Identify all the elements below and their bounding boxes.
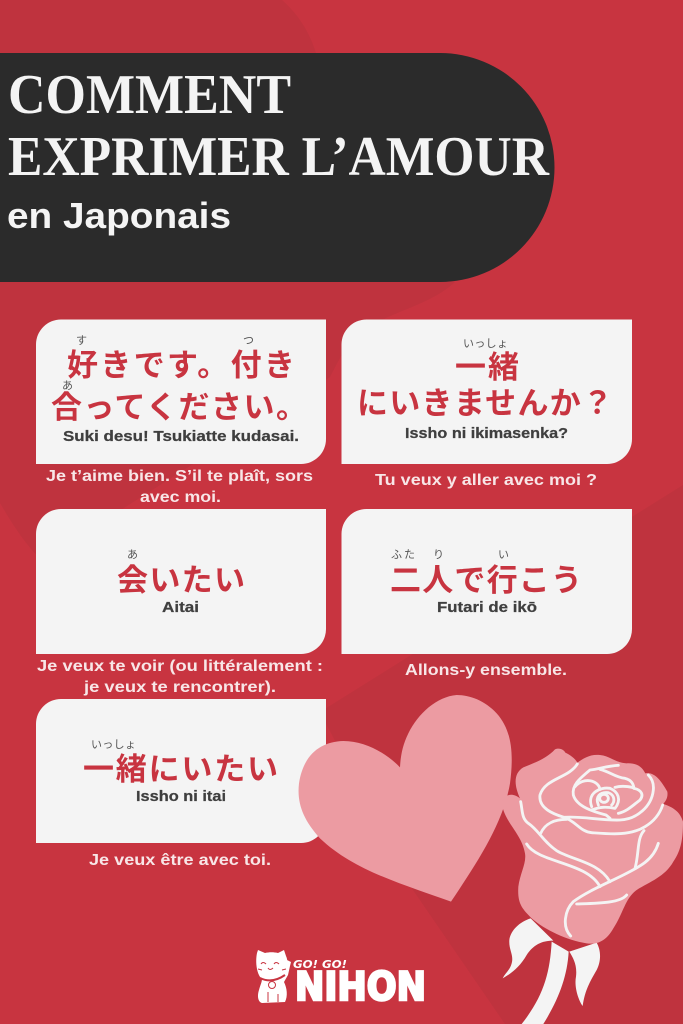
romaji: Suki desu! Tsukiatte kudasai. — [63, 428, 299, 445]
background dark heart, lower right — [320, 485, 683, 1024]
japanese phrase: 好きです。付き — [67, 348, 295, 383]
caption 3: Je veux te voir (ou littéralement : — [37, 658, 323, 675]
caption 1: Je t’aime bien. S’il te plaît, sors — [46, 468, 313, 485]
caption 5: Je veux être avec toi. — [89, 852, 271, 869]
japanese phrase: 一緒 — [455, 350, 519, 385]
card 5 — [36, 699, 326, 843]
japanese phrase: 一緒にいたい — [83, 752, 278, 787]
romaji: Futari de ikō — [437, 599, 537, 616]
furigana: あ — [127, 548, 138, 561]
japanese phrase — [51, 348, 307, 425]
card 3 — [36, 509, 326, 654]
title line 1: COMMENT — [8, 64, 291, 126]
furigana: いっしょ — [91, 738, 136, 751]
rose petal lines — [521, 764, 663, 936]
furigana — [391, 548, 509, 561]
romaji: Aitai — [162, 599, 199, 616]
caption 1 — [46, 468, 313, 506]
japanese phrase: 二人で行こう — [390, 563, 582, 598]
background dark heart, upper left — [0, 0, 455, 560]
header banner — [0, 53, 554, 282]
japanese phrase — [357, 350, 613, 421]
icon: rose — [502, 749, 683, 1024]
furigana: ふた — [391, 548, 415, 561]
subtitle: en Japonais — [7, 195, 231, 236]
icon: lucky cat — [256, 950, 291, 1003]
caption 2: Tu veux y aller avec moi ? — [375, 472, 597, 489]
furigana: り — [433, 548, 444, 561]
furigana: いっしょ — [463, 337, 508, 350]
furigana: あ — [62, 379, 73, 392]
romaji: Issho ni itai — [136, 788, 226, 805]
stem and leaves — [503, 918, 600, 1024]
cat face and collar — [258, 962, 286, 1002]
caption 3 — [37, 658, 323, 696]
cat bell — [268, 982, 276, 988]
icon: pink heart — [299, 695, 512, 902]
card 4 — [342, 509, 632, 654]
japanese phrase: にいきませんか？ — [357, 386, 613, 421]
caption 1: avec moi. — [140, 489, 221, 506]
romaji: Issho ni ikimasenka? — [405, 425, 568, 442]
rose bloom — [502, 749, 683, 944]
title line 2: EXPRIMER L’AMOUR — [8, 126, 550, 188]
furigana: つ — [243, 335, 254, 347]
cat silhouette — [256, 950, 291, 1003]
furigana: す — [76, 334, 87, 347]
caption 4: Allons-y ensemble. — [405, 662, 567, 679]
logo: Go! Go! Nihon — [256, 950, 426, 1010]
card 2 — [342, 320, 632, 464]
japanese phrase: 合ってください。 — [51, 390, 307, 425]
card 1 — [36, 320, 326, 464]
logo large text: NIHON — [295, 965, 426, 1010]
japanese phrase: 会いたい — [117, 563, 245, 598]
furigana: い — [498, 549, 509, 561]
furigana — [62, 334, 254, 392]
caption 3: je veux te rencontrer). — [83, 679, 276, 696]
logo small text: GO! GO! — [293, 958, 347, 971]
